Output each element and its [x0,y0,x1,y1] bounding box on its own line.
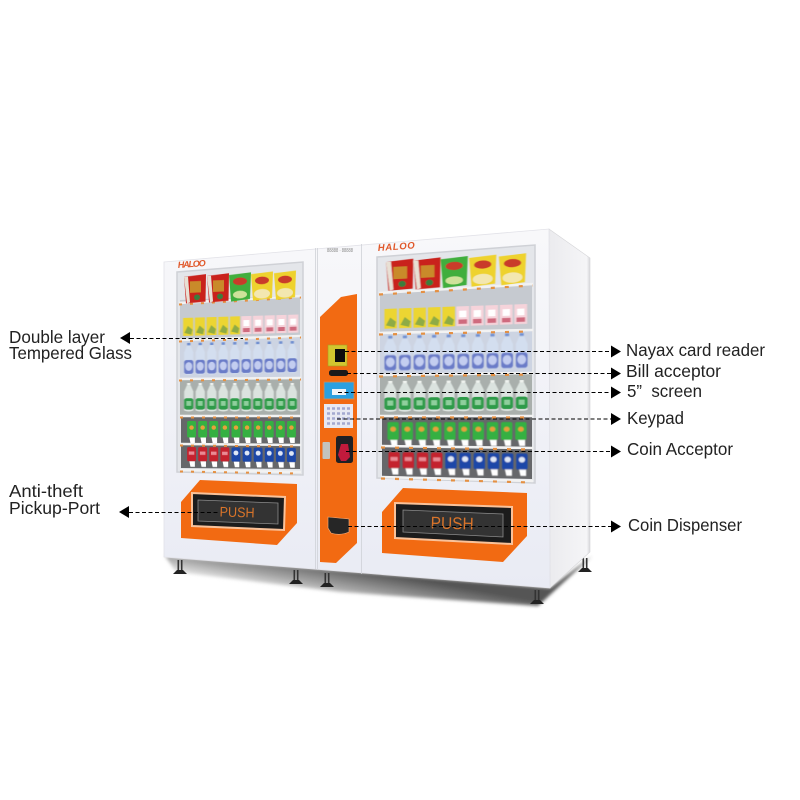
keypad [324,404,353,428]
arrow [120,332,243,344]
arrow [337,413,621,425]
left pickup port [181,480,297,545]
right brand logo: HALOO [377,240,416,254]
left shelves [179,296,301,472]
right row: juice boxes [384,304,527,329]
coin return plate [322,442,330,459]
left brand logo: HALOO [177,258,206,270]
callout: nayax card reader: Nayax card reader [626,340,765,360]
right pickup port [382,488,527,562]
callout: coin acceptor [346,439,733,459]
arrow [119,506,220,518]
callout: coin dispenser [348,515,742,535]
left row: juice boxes [183,315,298,336]
arrow [347,368,621,380]
left row: green bottles [184,383,297,412]
left row: chips [184,271,296,304]
floor shadow [165,556,592,606]
left row: water [184,341,297,375]
callout: coin dispenser: Coin Dispenser [628,515,742,535]
label text: Pickup-Port [9,498,100,518]
bill acceptor slot [329,370,348,376]
label text: Tempered Glass [9,343,132,363]
left PUSH text: PUSH [219,504,255,520]
left row: red and blue cans [187,447,296,468]
screen [324,382,354,399]
central column seams [316,244,362,574]
right row: red and blue cans [388,452,528,476]
vending machine [164,229,592,604]
arrow [346,446,621,458]
column header label: 88888 · 88888 [327,248,353,254]
central orange control panel [320,294,357,563]
coin dispenser [328,517,349,534]
callout: 5 inch screen [338,381,702,401]
right orange panel [382,488,527,562]
right shelves [379,284,533,481]
callout: bill acceptor [347,361,721,381]
right row: green cans [387,422,527,446]
left door window [177,262,303,475]
left black flap [192,493,285,530]
right row: water [384,333,528,372]
label text: Anti-theft [9,481,83,501]
left orange panel [181,480,297,545]
machine feet [173,558,592,604]
callout: nayax card reader [345,340,765,360]
callout: 5 inch screen: 5” screen [627,381,702,401]
callout: keypad: Keypad [627,408,684,428]
callout: bill acceptor: Bill acceptor [626,361,721,381]
machine side panel [549,229,590,588]
callout: double layer tempered glass [9,327,243,363]
arrow [338,386,621,398]
card reader [328,345,347,366]
right door window [377,245,535,483]
callout: anti-theft pickup-port [9,481,220,518]
arrow [348,520,621,532]
left row: green cans [187,421,296,443]
label text: Double layer [9,327,105,347]
callout: keypad [337,408,684,428]
machine front body [164,229,550,588]
right row: chips [386,253,526,291]
right row: green bottles [384,380,528,412]
right PUSH text: PUSH [430,513,474,534]
arrow [345,346,621,358]
callout: coin acceptor: Coin Acceptor [627,439,733,459]
right window interior [377,245,535,483]
coin acceptor [336,436,353,463]
left window interior [177,262,303,475]
right black flap [395,503,512,544]
